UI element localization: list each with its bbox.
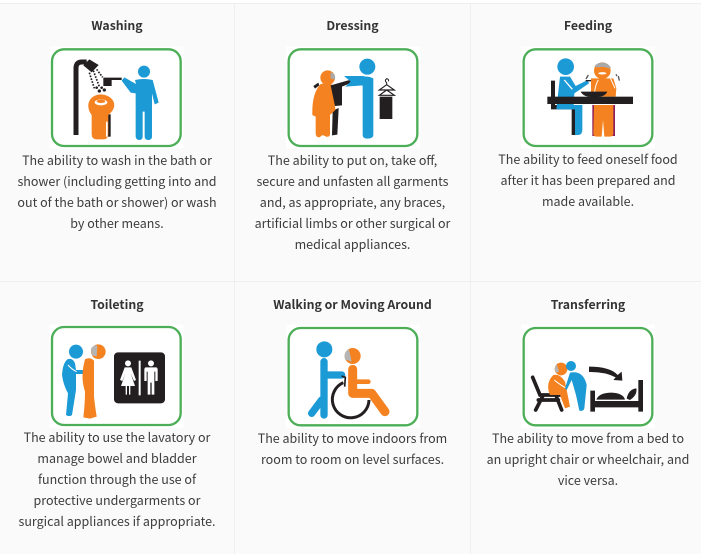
heading: feeding: Feeding (564, 16, 612, 34)
text: feeding (498, 149, 678, 210)
text: washing: The ability to wash in the bath or (22, 150, 212, 169)
icon: dressing (288, 48, 418, 148)
text: walking: room to room on level surfaces. (261, 449, 444, 468)
text: toileting: manage bowel and bladder (37, 448, 197, 467)
text: toileting: protective undergarments or (34, 490, 200, 509)
text: washing: out of the bath or shower) or wash (17, 192, 217, 211)
icon: wheelchair (288, 326, 418, 426)
text: dressing: The ability to put on, take off, (268, 150, 437, 169)
text: washing: shower (including getting into and (17, 171, 217, 190)
text: washing: by other means. (70, 213, 164, 232)
text: dressing (255, 150, 450, 253)
text: toileting: The ability to use the lavatory or (24, 427, 210, 446)
panel: transferring (471, 282, 701, 554)
text: transferring: an upright chair or wheelchair, and (487, 449, 689, 468)
heading: walking or moving around: Walking or Moving Around (273, 295, 432, 313)
panel: walking or moving around (235, 282, 470, 554)
text: feeding: made available. (542, 191, 634, 210)
heading: transferring: Transferring (551, 295, 625, 313)
text: feeding: The ability to feed oneself food (498, 149, 678, 168)
text: dressing: medical appliances. (295, 234, 410, 253)
text: toileting: surgical appliances if appropriate. (18, 511, 216, 530)
text: transferring (487, 428, 689, 489)
panel: dressing (235, 4, 470, 281)
text: toileting (18, 427, 216, 530)
heading: toileting: Toileting (90, 295, 144, 313)
icon: toileting (50, 326, 182, 426)
panel: washing (0, 4, 234, 281)
heading: washing: Washing (91, 16, 143, 34)
text: transferring: vice versa. (558, 470, 618, 489)
heading: dressing: Dressing (326, 16, 379, 34)
text: dressing: secure and unfasten all garments (256, 171, 449, 190)
text: walking: The ability to move indoors from (258, 428, 447, 447)
icon: washing (50, 48, 182, 148)
icon: feeding (522, 48, 654, 148)
text: walking (258, 428, 447, 468)
text: feeding: after it has been prepared and (500, 170, 676, 189)
text: transferring: The ability to move from a bed to (492, 428, 684, 447)
panel: toileting (0, 282, 234, 554)
panel: feeding (471, 4, 701, 281)
text: washing (17, 150, 217, 232)
icon: transferring (522, 326, 654, 426)
text: toileting: function through the use of (38, 469, 196, 488)
text: dressing: and, as appropriate, any braces, (260, 192, 445, 211)
text: dressing: artificial limbs or other surgical or (255, 213, 450, 232)
